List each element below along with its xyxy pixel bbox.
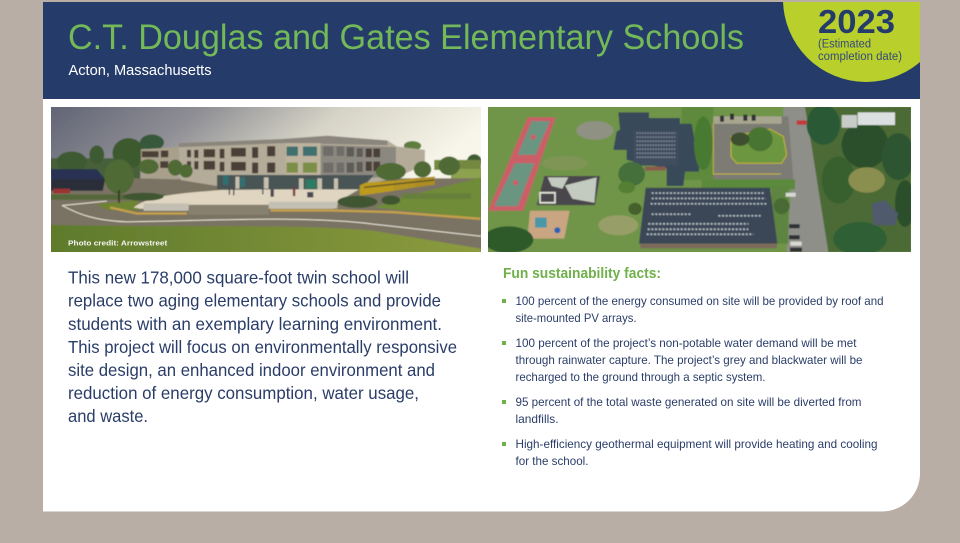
- school buses: [360, 177, 435, 195]
- fact 2: water: through rainwater capture. The project’s grey and blackwater will be: [516, 354, 862, 367]
- intro paragraph: replace two aging elementary schools and provide: [68, 290, 441, 310]
- plaza: [134, 188, 361, 209]
- fact 1: solar energy: site-mounted PV arrays.: [516, 312, 636, 325]
- fact 2: water: [502, 337, 862, 384]
- roof of north school building: [613, 112, 699, 186]
- lawn strip: [702, 179, 795, 189]
- sustainability facts list: [502, 295, 884, 468]
- fact 4: geothermal: for the school.: [516, 455, 588, 468]
- photo: architectural rendering of the school: [51, 107, 481, 252]
- parked cars: [720, 114, 802, 252]
- neighbouring buildings: [858, 112, 895, 125]
- header banner: [43, 0, 949, 99]
- intro paragraph: This new 178,000 square-foot twin school will: [68, 268, 409, 288]
- photo credit: Photo credit: Arrowstreet: [68, 239, 168, 248]
- fact 4: geothermal: High-efficiency geothermal equipment will provide heating and cooling: [516, 438, 878, 451]
- trees: [483, 105, 915, 255]
- title: C.T. Douglas and Gates Elementary Schools: [68, 17, 744, 57]
- building windows: [142, 146, 380, 173]
- fact 2: water: 100 percent of the project’s non-potable water demand will be met: [516, 337, 857, 350]
- basketball courts: [488, 117, 556, 211]
- building columns: [235, 177, 338, 190]
- foreground trees: [104, 157, 460, 208]
- intro paragraph: and waste.: [68, 406, 148, 426]
- completion date badge: [783, 2, 920, 82]
- carport: [51, 169, 105, 191]
- sustainability facts heading: Fun sustainability facts:: [503, 266, 661, 282]
- intro paragraph: This project will focus on environmentally responsive: [68, 337, 457, 357]
- photo: aerial view of the existing site: [488, 107, 911, 252]
- fact 1: solar energy: [502, 295, 884, 325]
- playground: [527, 211, 570, 239]
- completion date badge: 2023: [818, 3, 895, 40]
- roof of south school building with solar panels: [639, 188, 777, 244]
- school building: [141, 147, 179, 179]
- fact 3: waste: landfills.: [516, 413, 558, 426]
- landscaped island: [731, 129, 787, 163]
- ground and road: [47, 178, 484, 254]
- completion date badge: (Estimated: [818, 38, 871, 50]
- intro paragraph: reduction of energy consumption, water usage,: [68, 383, 419, 403]
- intro paragraph: site design, an enhanced indoor environment and: [68, 360, 435, 380]
- background trees: [47, 134, 482, 180]
- fact 3: waste: [502, 396, 862, 426]
- intro paragraph: students with an exemplary learning environment.: [68, 314, 442, 334]
- world map mural: [537, 176, 600, 205]
- parking lot and roads: [783, 107, 832, 252]
- fact 3: waste: 95 percent of the total waste generated on site will be diverted from: [516, 396, 862, 409]
- people on plaza: [229, 186, 313, 197]
- fact 4: geothermal: [502, 438, 878, 468]
- completion date badge: completion date): [818, 51, 902, 63]
- fact 2: water: recharged to the ground through a septic system.: [516, 371, 766, 384]
- wooden guard rails: [110, 207, 480, 219]
- location subtitle: Acton, Massachusetts: [68, 62, 212, 79]
- intro paragraph: [68, 268, 457, 426]
- fact 1: solar energy: 100 percent of the energy consumed on site will be provided by roof and: [516, 295, 884, 308]
